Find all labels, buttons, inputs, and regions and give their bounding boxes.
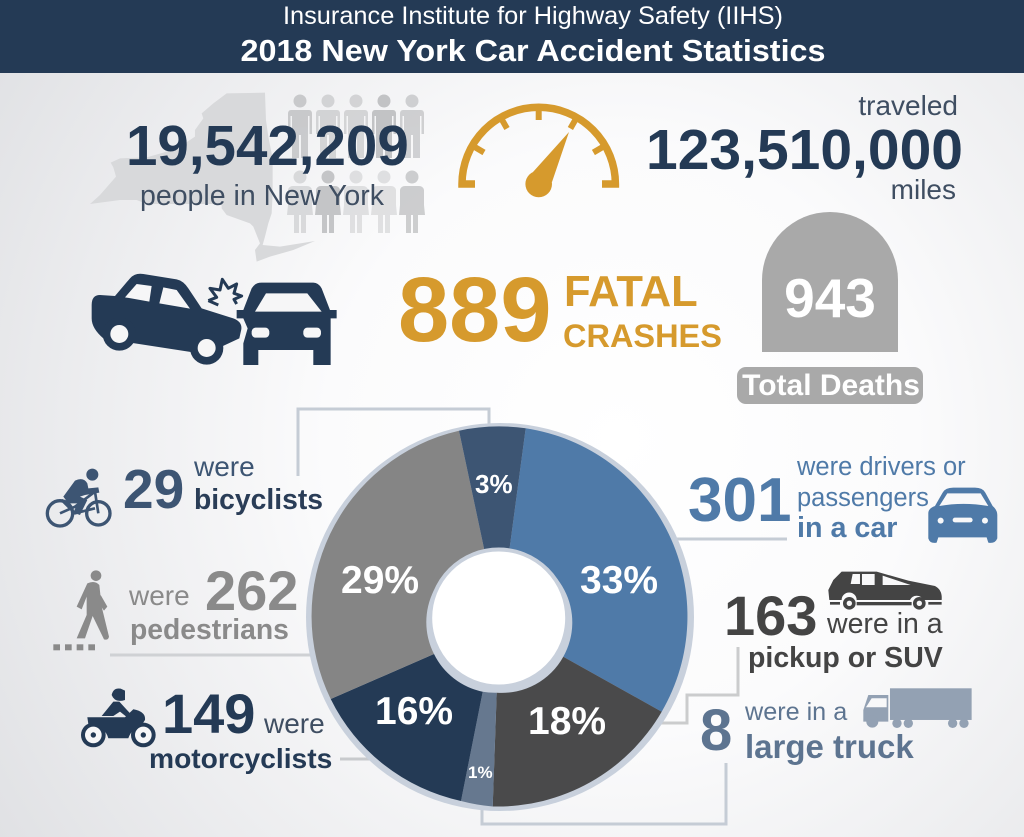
miles traveled stat xyxy=(646,90,963,205)
header subtitle: Insurance Institute for Highway Safety (IIHS) xyxy=(283,2,783,30)
fatal crashes stat: CRASHES xyxy=(563,318,722,354)
icon: SUV xyxy=(828,572,942,610)
fatal crashes stat xyxy=(398,259,722,361)
percentage labels: 29% xyxy=(341,559,419,602)
pedestrians stat: pedestrians xyxy=(130,613,289,645)
bicyclists stat: bicyclists xyxy=(194,483,323,515)
icon: tombstone with total deaths xyxy=(737,212,923,404)
bicyclists stat: were xyxy=(193,451,255,482)
icon: car xyxy=(928,488,997,543)
pickup and SUV stat: pickup or SUV xyxy=(748,642,943,674)
motorcyclists stat: were xyxy=(263,708,325,739)
motorcyclists stat: 149 xyxy=(162,682,255,745)
icon: bicyclist xyxy=(47,469,110,526)
percentage labels: 3% xyxy=(475,469,513,499)
donut chart xyxy=(306,423,694,811)
icon: motorcyclist xyxy=(81,688,156,747)
icon: car crash xyxy=(92,274,337,365)
slice: bicyclists 3% xyxy=(459,426,526,553)
population stat xyxy=(126,114,409,212)
car occupants stat xyxy=(688,453,966,544)
slice: pickup 18% xyxy=(493,657,662,807)
total deaths label: Total Deaths xyxy=(742,369,920,402)
percentage labels: 18% xyxy=(528,700,606,743)
title: 2018 New York Car Accident Statistics xyxy=(240,33,826,68)
car occupants stat: passengers xyxy=(797,484,929,512)
bicyclists stat: 29 xyxy=(123,458,184,520)
leader lines xyxy=(110,409,787,824)
icon: truck xyxy=(863,688,972,728)
icon: pedestrian xyxy=(53,570,109,650)
miles traveled stat: 123,510,000 xyxy=(646,118,963,182)
percentage labels: 33% xyxy=(580,559,658,602)
car occupants stat: were drivers or xyxy=(796,453,966,481)
fatal crashes stat: FATAL xyxy=(564,268,698,316)
large truck stat: 8 xyxy=(700,698,732,763)
icon: population figures xyxy=(287,94,425,233)
pickup and SUV stat xyxy=(724,584,943,674)
car occupants stat: in a car xyxy=(797,512,897,544)
slice: truck 1% xyxy=(461,692,497,806)
bicyclists stat xyxy=(123,451,323,520)
pickup and SUV stat: were in a xyxy=(826,608,943,640)
slice: car 33% xyxy=(509,428,687,712)
header banner xyxy=(0,0,1024,73)
car occupants stat: 301 xyxy=(688,466,791,535)
icon: New York state map xyxy=(90,93,315,262)
pedestrians stat: 262 xyxy=(205,559,298,622)
population stat: people in New York xyxy=(140,180,385,212)
slice: pedestrians 29% xyxy=(312,431,485,699)
icon: tombstone with total deaths: 943 xyxy=(784,267,876,329)
icon: speedometer xyxy=(462,107,615,197)
motorcyclists stat xyxy=(149,682,332,774)
population stat: 19,542,209 xyxy=(126,114,409,177)
percentage labels xyxy=(341,469,658,782)
pickup and SUV stat: 163 xyxy=(724,584,817,647)
pedestrians stat: were xyxy=(128,580,190,611)
miles traveled stat: miles xyxy=(891,174,956,205)
percentage labels: 1% xyxy=(468,763,493,782)
large truck stat: large truck xyxy=(745,728,914,765)
motorcyclists stat: motorcyclists xyxy=(149,742,332,774)
large truck stat xyxy=(700,698,914,765)
pedestrians stat xyxy=(128,559,298,645)
percentage labels: 16% xyxy=(375,690,453,733)
fatal crashes stat: 889 xyxy=(398,259,552,361)
slice: motorcyclists 16% xyxy=(331,654,483,801)
large truck stat: were in a xyxy=(744,698,848,726)
miles traveled stat: traveled xyxy=(858,90,958,121)
